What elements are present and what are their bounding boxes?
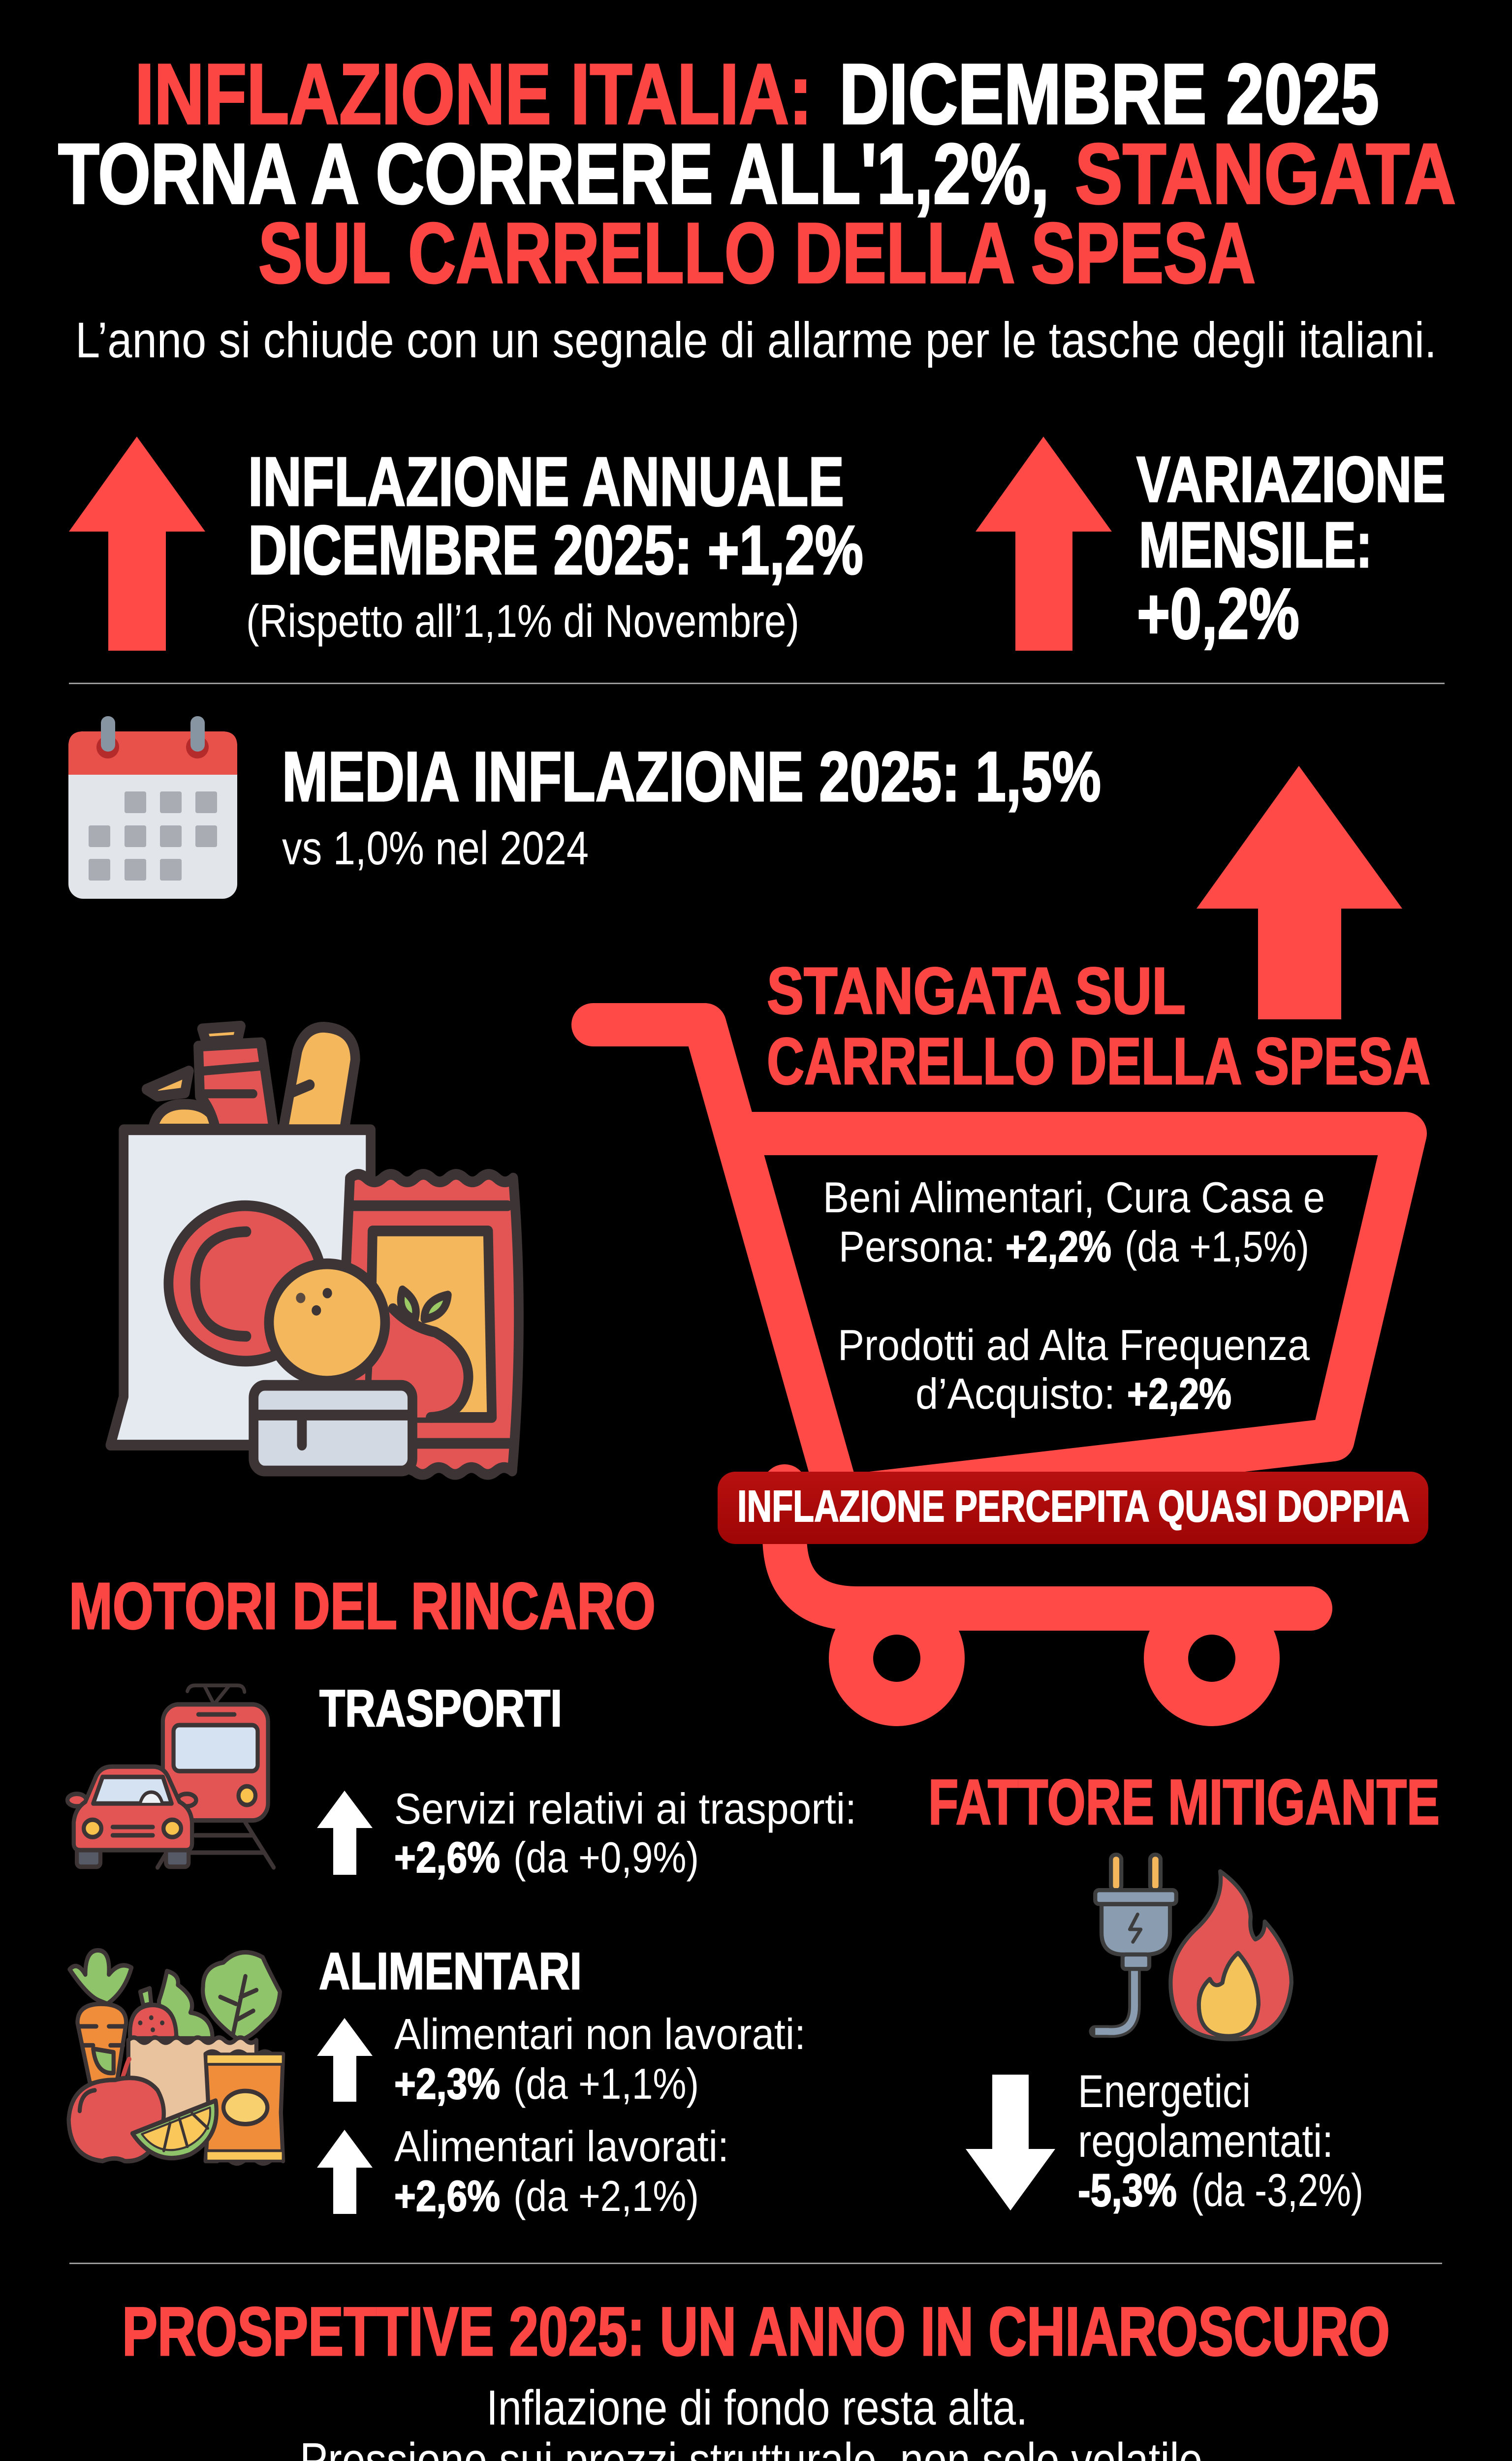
transport section: (da +0,9%) — [513, 1833, 699, 1882]
annual inflation stat — [246, 442, 863, 647]
transport section: TRASPORTI — [319, 1679, 562, 1737]
heading: motori del rincaro: MOTORI DEL RINCARO — [69, 1570, 656, 1643]
callout: perceived inflation banner — [718, 1472, 1428, 1544]
title: TORNA A CORRERE ALL'1,2%, — [58, 126, 1049, 221]
monthly variation stat: +0,2% — [1137, 573, 1299, 654]
icon: plug and flame — [1095, 1855, 1292, 2039]
text block: outlook — [81, 2380, 1431, 2461]
heading: stangata sul carrello — [767, 954, 1430, 1098]
arrow: monthly variation up — [976, 437, 1112, 651]
energy stat: Energetici — [1078, 2065, 1251, 2117]
cart text: shopping basket figures: +2,2% — [1127, 1369, 1231, 1418]
energy stat: (da -3,2%) — [1191, 2164, 1363, 2216]
arrow: energy down — [966, 2075, 1055, 2210]
energy stat: -5,3% — [1078, 2164, 1177, 2216]
cart text: shopping basket figures: d’Acquisto: — [915, 1369, 1115, 1418]
cart text: shopping basket figures: Beni Alimentari, Cura Casa e — [823, 1173, 1325, 1222]
title: INFLAZIONE ITALIA: — [135, 46, 812, 142]
arrow: processed food up — [317, 2130, 373, 2214]
energy stat — [1078, 2065, 1363, 2216]
cart text: shopping basket figures: Prodotti ad Alta Frequenza — [838, 1321, 1310, 1369]
food section — [317, 1942, 806, 2220]
arrow: unprocessed food up — [317, 2018, 373, 2102]
icon: large rising arrow — [1197, 766, 1402, 1019]
text block: outlook: Inflazione di fondo resta alta. — [486, 2380, 1028, 2435]
cart text: shopping basket figures — [823, 1173, 1325, 1418]
cart text: shopping basket figures: +2,2% — [1006, 1222, 1111, 1271]
annual inflation stat: DICEMBRE 2025: +1,2% — [248, 511, 863, 589]
food section: ALIMENTARI — [319, 1942, 582, 2000]
monthly variation stat — [1136, 443, 1446, 654]
icon: groceries and vegetables — [69, 1950, 283, 2164]
food section: +2,3% — [394, 2059, 500, 2108]
food section: Alimentari non lavorati: — [394, 2010, 806, 2058]
annual inflation stat: INFLAZIONE ANNUALE — [248, 442, 844, 520]
annual inflation stat: (Rispetto all’1,1% di Novembre) — [246, 595, 799, 647]
icon: shopping cart — [593, 1025, 1405, 1704]
average inflation stat — [282, 738, 1101, 875]
transport section — [317, 1679, 856, 1882]
transport section: +2,6% — [394, 1833, 500, 1882]
icon: calendar — [68, 716, 237, 899]
cart text: shopping basket figures: (da +1,5%) — [1125, 1222, 1309, 1271]
average inflation stat: MEDIA INFLAZIONE 2025: 1,5% — [282, 738, 1101, 816]
arrow: annual inflation up — [69, 437, 205, 651]
transport section: Servizi relativi ai trasporti: — [394, 1784, 856, 1833]
heading: stangata sul carrello: STANGATA SUL — [767, 954, 1186, 1028]
food section: (da +1,1%) — [513, 2059, 699, 2108]
title: DICEMBRE 2025 — [839, 46, 1379, 142]
energy stat: regolamentati: — [1078, 2115, 1333, 2167]
monthly variation stat: MENSILE: — [1139, 508, 1372, 581]
cart text: shopping basket figures: Persona: — [839, 1222, 995, 1271]
food section: +2,6% — [394, 2172, 500, 2220]
title: SUL CARRELLO DELLA SPESA — [258, 205, 1256, 301]
food section: Alimentari lavorati: — [394, 2122, 729, 2171]
arrow: transport up — [317, 1791, 373, 1875]
icon: grocery bag — [110, 1026, 519, 1475]
icon: car and train — [67, 1685, 274, 1867]
average inflation stat: vs 1,0% nel 2024 — [282, 822, 589, 875]
title — [58, 46, 1456, 301]
food section: (da +2,1%) — [513, 2172, 699, 2220]
